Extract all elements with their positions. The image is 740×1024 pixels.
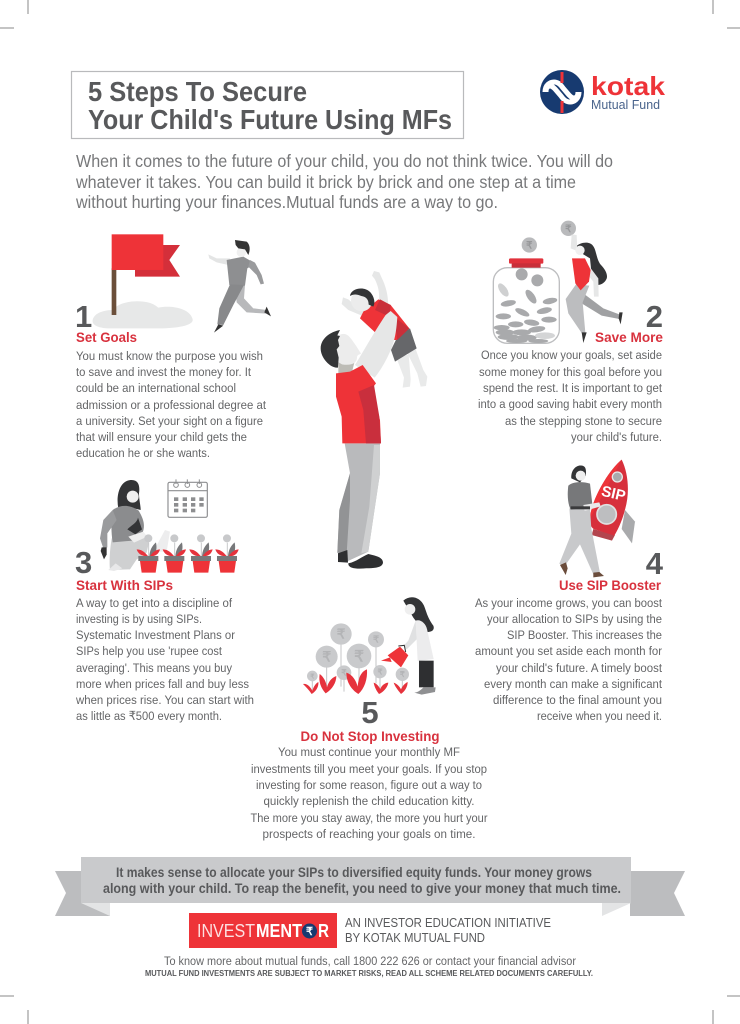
illustration: woman jumping with coin: ₹ [565,224,572,235]
intro text: without hurting your finances.Mutual funds are a way to go. [75,192,498,212]
step 3 body: SIPs help you use 'rupee cost [76,644,223,658]
step 3 heading: Start With SIPs [76,578,173,594]
logo: kotak mutual fund: Mutual Fund [591,97,660,112]
intro text [75,151,613,212]
intro text: whatever it takes. You can build it brick by brick and one step at a time [75,172,576,192]
step 3 body: more when prices fall and buy less [76,677,249,691]
step 2 body: spend the rest. It is important to get [483,381,663,395]
step 1 body: admission or a professional degree at [76,398,267,412]
intro text: When it comes to the future of your child, you do not think twice. You will do [76,151,613,171]
initiative text: BY KOTAK MUTUAL FUND [345,931,485,945]
illustration: woman carrying rocket [559,465,604,577]
step 1 body: could be an international school [76,381,236,395]
logo: investmentor: MENT [256,921,302,941]
step 4 heading: Use SIP Booster [559,578,661,594]
logo: investmentor: R [318,921,329,941]
title: 5 Steps To Secure [88,76,307,107]
illustration: coin plants: ₹ [354,648,364,665]
logo: investmentor [189,913,337,948]
illustration: rocket with SIP label [590,460,635,543]
step 1 body: a university. Set your sight on a figure [76,414,263,428]
potted plants [137,534,239,573]
step 4 body: amount you set aside each month for [475,644,662,658]
banner: It makes sense to allocate your SIPs to diversified equity funds. Your money grows [116,865,592,880]
step 5 body: investments till you meet your goals. If you stop [251,762,487,776]
logo: investmentor: INVEST [197,921,255,941]
illustration: coin plants: ₹ [400,670,405,679]
step 2 number: 2 [646,299,663,334]
step 5 body: quickly replenish the child education kitty. [264,794,474,808]
father pants [337,443,380,562]
title [72,72,464,138]
step 2 body: Once you know your goals, set aside [481,348,662,362]
illustration: coin plants [303,623,409,694]
step 5 body: The more you stay away, the more you hurt your [250,811,488,825]
step 3 body: averaging'. This means you buy [76,661,233,675]
step 4 body: your allocation to SIPs by using the [487,612,662,626]
father shoes [338,550,348,563]
step 3 number: 3 [75,545,92,580]
illustration: coin plants: ₹ [377,668,383,677]
step 4 body: As your income grows, you can boost [475,596,663,610]
illustration: coin plants: ₹ [341,668,347,678]
initiative text [345,916,551,945]
step 1 number: 1 [75,299,92,334]
step 4 body: every month can make a significant [484,677,663,691]
step 3 body [75,596,254,723]
illustration: woman jumping with coin [561,221,623,343]
step 1 text [75,299,267,460]
illustration: woman gardening with plants [100,479,239,573]
step 1 body: to save and invest the money for. It [76,365,252,379]
title: Your Child's Future Using MFs [88,104,452,135]
step 5 body: investing for some reason, figure out a way to [256,778,482,792]
child body [360,299,409,340]
illustration: coin jar [493,237,559,343]
disclaimer: MUTUAL FUND INVESTMENTS ARE SUBJECT TO MARKET RISKS, READ ALL SCHEME RELATED DOCUMENTS CAREFULLY. [145,969,593,978]
father shirt [336,365,381,443]
step 5 body [250,745,488,841]
step 1 heading: Set Goals [76,330,137,346]
logo: kotak mutual fund [540,70,666,114]
step 3 body: investing is by using SIPs. [76,612,202,626]
step 5 heading: Do Not Stop Investing [300,729,440,745]
illustration: coin plants: ₹ [310,672,315,680]
step 4 body: your child's future. A timely boost [496,661,663,675]
illustration: coin plants: ₹ [373,635,379,645]
step 3 body: A way to get into a discipline of [76,596,233,610]
step 4 body: SIP Booster. This increases the [507,628,662,642]
step 5 text [250,695,488,841]
step 2 heading: Save More [595,330,663,346]
step 2 body: into a good saving habit every month [478,397,662,411]
step 3 body: Systematic Investment Plans or [76,628,235,642]
step 4 text [475,546,664,723]
step 2 text [478,299,663,444]
step 1 body: that will ensure your child gets the [76,430,247,444]
step 4 body: receive when you need it. [537,709,662,723]
child legs [397,347,427,388]
calendar icon [168,479,207,517]
step 4 body [475,596,663,723]
step 1 body [76,349,267,460]
step 3 body: when prices rise. You can start with [75,693,254,707]
step 2 body: as the stepping stone to secure [505,414,662,428]
illustration: coin plants: ₹ [337,627,346,642]
step 3 body: as little as ₹500 every month. [76,709,222,723]
father arms [355,311,397,378]
step 5 number: 5 [361,695,379,730]
step 2 body [478,348,663,444]
step 1 body: You must know the purpose you wish [76,349,263,363]
illustration: running man [208,240,271,333]
illustration: woman watering plants [381,597,436,695]
banner [55,857,685,916]
father neck and head [338,360,355,375]
step 3 text [75,545,254,723]
step 2 body: your child's future. [571,430,662,444]
step 5 body: prospects of reaching your goals on time. [262,827,476,841]
initiative text: AN INVESTOR EDUCATION INITIATIVE [345,916,551,930]
illustration: coin plants: ₹ [322,649,331,665]
step 5 body: You must continue your monthly MF [278,745,460,759]
logo: investmentor: ₹ [306,926,313,938]
illustration: coin jar: ₹ [526,241,533,252]
step 4 body: difference to the final amount you [493,693,662,707]
footer contact: To know more about mutual funds, call 1800 222 626 or contact your financial advisor [164,954,576,968]
woman [100,480,170,571]
step 1 body: education he or she wants. [76,446,210,460]
logo: kotak mutual fund: kotak [591,71,666,101]
illustration: rocket with SIP label: SIP [600,483,627,505]
illustration: flag on cloud [93,234,193,328]
step 2 body: some money for this goal before you [479,365,662,379]
child arms [342,297,370,318]
step 4 number: 4 [646,546,664,581]
banner: along with your child. To reap the benefit, you need to give your money that much time. [103,881,621,896]
illustration: father lifting child [321,271,427,569]
